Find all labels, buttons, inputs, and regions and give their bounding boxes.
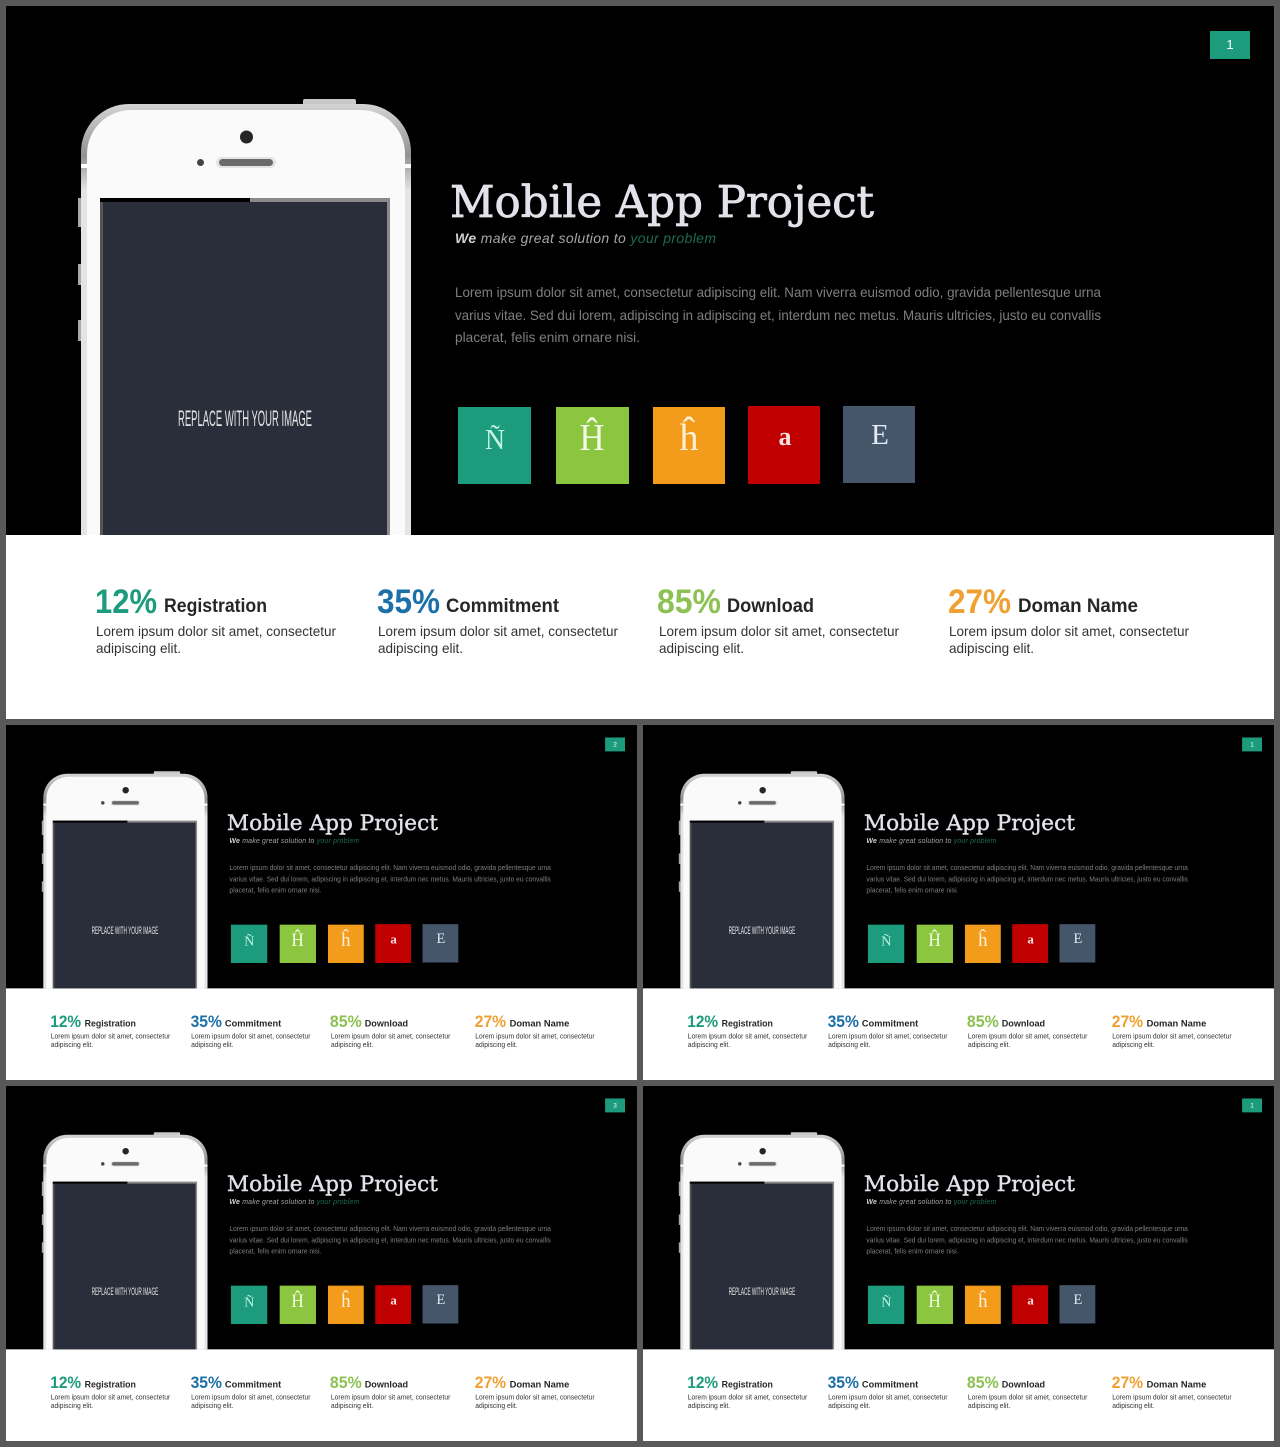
stat: domain name: adipiscing elit. [949, 640, 1034, 656]
page number badge [605, 1098, 625, 1112]
page number badge [1210, 31, 1250, 59]
body paragraph: varius vitae. Sed dui lorem, adipiscing in adipiscing et, interdum nec metus. Mauris ultricies, justo eu convallis [866, 1237, 1188, 1244]
icon tiles: E [871, 419, 889, 451]
icon tiles: ĥ [978, 929, 988, 951]
stat: download [330, 1012, 451, 1049]
page number badge: 1 [1250, 1102, 1254, 1109]
stat: commitment [377, 583, 618, 656]
body paragraph: placerat, felis enim ornare nisi. [455, 329, 640, 345]
stat: download: 85% [967, 1373, 999, 1392]
body paragraph: Lorem ipsum dolor sit amet, consectetur adipiscing elit. Nam viverra euismod odio, gravida pellentesque urna [455, 284, 1101, 300]
icon tiles: E [1073, 1292, 1082, 1308]
stat: domain name: 27% [1112, 1373, 1143, 1392]
icon tiles: Ĥ [291, 929, 304, 951]
stat: registration: adipiscing elit. [51, 1403, 93, 1410]
stat: registration [95, 583, 336, 656]
icon tiles: a [390, 932, 397, 947]
stat: commitment: 35% [377, 583, 440, 621]
slide 1: large [6, 6, 1274, 719]
icon tiles: a [1027, 932, 1034, 947]
stat: registration: 12% [50, 1012, 81, 1031]
stat: commitment: Commitment [225, 1380, 282, 1391]
phone mockup [42, 771, 208, 988]
stat: registration: Lorem ipsum dolor sit amet, consectetur [51, 1034, 171, 1041]
stat: download [967, 1012, 1088, 1049]
body paragraph: placerat, felis enim ornare nisi. [229, 887, 322, 894]
icon tiles: ĥ [341, 929, 351, 951]
stat: registration: Registration [722, 1019, 773, 1030]
phone mockup: REPLACE WITH YOUR IMAGE [729, 925, 795, 937]
stat: download: 85% [967, 1012, 999, 1031]
icon tiles [458, 406, 915, 484]
body paragraph: Lorem ipsum dolor sit amet, consectetur adipiscing elit. Nam viverra euismod odio, gravida pellentesque urna [866, 865, 1188, 872]
stat: domain name [475, 1373, 595, 1410]
stat: domain name: Lorem ipsum dolor sit amet, consectetur [949, 623, 1189, 639]
icon tiles: Ĥ [291, 1290, 304, 1312]
body paragraph: Lorem ipsum dolor sit amet, consectetur adipiscing elit. Nam viverra euismod odio, gravida pellentesque urna [866, 1226, 1188, 1233]
slide 4: thumbnail bottom left [6, 1086, 637, 1441]
stat: domain name: Lorem ipsum dolor sit amet, consectetur [1112, 1034, 1232, 1041]
stat: download [330, 1373, 451, 1410]
icon tiles: Ñ [244, 934, 254, 950]
stat: download: Lorem ipsum dolor sit amet, consectetur [659, 623, 899, 639]
icon tiles: E [1073, 931, 1082, 947]
stat: commitment: adipiscing elit. [191, 1403, 233, 1410]
stat: download: Lorem ipsum dolor sit amet, consectetur [968, 1034, 1088, 1041]
slide 2: thumbnail top left [6, 725, 637, 1080]
body paragraph [866, 1226, 1188, 1255]
body paragraph: Lorem ipsum dolor sit amet, consectetur adipiscing elit. Nam viverra euismod odio, gravida pellentesque urna [229, 1226, 551, 1233]
stat: registration: adipiscing elit. [688, 1042, 730, 1049]
stat: domain name: adipiscing elit. [1112, 1042, 1155, 1049]
subtitle: We make great solution to your problem [866, 1199, 996, 1206]
body paragraph: placerat, felis enim ornare nisi. [866, 887, 959, 894]
icon tiles: ĥ [978, 1290, 988, 1312]
stat: registration: Lorem ipsum dolor sit amet, consectetur [688, 1034, 808, 1041]
stat: commitment: Lorem ipsum dolor sit amet, consectetur [191, 1395, 311, 1402]
title: Mobile App Project [864, 811, 1075, 836]
stat: domain name [948, 583, 1189, 656]
icon tiles: Ĥ [580, 417, 604, 459]
stat: commitment: 35% [191, 1373, 222, 1392]
body paragraph: placerat, felis enim ornare nisi. [866, 1248, 959, 1255]
stat: domain name: Doman Name [1018, 596, 1138, 617]
stat: domain name: 27% [1112, 1012, 1143, 1031]
stat: registration: Registration [85, 1019, 136, 1030]
stat: download: 85% [330, 1012, 362, 1031]
stat: registration: Registration [164, 596, 267, 617]
stat: domain name: Lorem ipsum dolor sit amet, consectetur [475, 1034, 595, 1041]
page number badge: 3 [613, 1102, 617, 1109]
stat: domain name: Doman Name [510, 1019, 569, 1030]
stat: registration [687, 1012, 808, 1049]
stat: commitment: 35% [828, 1012, 859, 1031]
stat: registration: Lorem ipsum dolor sit amet, consectetur [51, 1395, 171, 1402]
stat: download: Download [365, 1380, 408, 1391]
icon tiles: a [778, 422, 792, 451]
page number badge: 2 [613, 741, 617, 748]
stat: commitment: Commitment [225, 1019, 282, 1030]
stat: commitment: adipiscing elit. [378, 640, 463, 656]
stat: download [967, 1373, 1088, 1410]
subtitle: We make great solution to your problem [229, 1199, 359, 1206]
icon tiles [231, 924, 458, 963]
dark upper panel [6, 6, 1274, 535]
stat: domain name [1112, 1012, 1232, 1049]
stat: commitment: adipiscing elit. [828, 1042, 870, 1049]
stat: commitment: Commitment [862, 1019, 919, 1030]
icon tiles: ĥ [341, 1290, 351, 1312]
stat: domain name [475, 1012, 595, 1049]
stat: download: 85% [657, 583, 721, 621]
stat: registration: adipiscing elit. [688, 1403, 730, 1410]
page number badge [1242, 737, 1262, 751]
body paragraph: varius vitae. Sed dui lorem, adipiscing in adipiscing et, interdum nec metus. Mauris ultricies, justo eu convallis [229, 876, 551, 883]
stat: commitment: Lorem ipsum dolor sit amet, consectetur [378, 623, 618, 639]
body paragraph: placerat, felis enim ornare nisi. [229, 1248, 322, 1255]
body paragraph [455, 284, 1101, 345]
stat: domain name [1112, 1373, 1232, 1410]
stat: download [657, 583, 899, 656]
stat: commitment: Lorem ipsum dolor sit amet, consectetur [191, 1034, 311, 1041]
icon tiles [868, 924, 1095, 963]
stat: domain name: Doman Name [1147, 1019, 1206, 1030]
stat: download: adipiscing elit. [659, 640, 744, 656]
body paragraph: varius vitae. Sed dui lorem, adipiscing in adipiscing et, interdum nec metus. Mauris ultricies, justo eu convallis [229, 1237, 551, 1244]
phone mockup [78, 99, 411, 535]
page number badge [605, 737, 625, 751]
phone mockup [679, 1132, 845, 1349]
white stats panel [6, 535, 1274, 719]
stat: registration: 12% [50, 1373, 81, 1392]
stat: commitment: Commitment [862, 1380, 919, 1391]
icon tiles [231, 1285, 458, 1324]
icon tiles: Ñ [881, 1295, 891, 1311]
stat: domain name: 27% [475, 1373, 506, 1392]
page number badge [1242, 1098, 1262, 1112]
stat: download: Lorem ipsum dolor sit amet, consectetur [968, 1395, 1088, 1402]
stat: download: Download [365, 1019, 408, 1030]
stat: download: Download [1002, 1380, 1045, 1391]
stat: commitment [828, 1012, 948, 1049]
stat: download: Download [1002, 1019, 1045, 1030]
stat: download: adipiscing elit. [968, 1042, 1010, 1049]
page number badge: 1 [1250, 741, 1254, 748]
body paragraph [229, 1226, 551, 1255]
body paragraph [229, 865, 551, 894]
stat: download: adipiscing elit. [331, 1042, 373, 1049]
icon tiles: E [436, 931, 445, 947]
stat: domain name: Doman Name [510, 1380, 569, 1391]
icon tiles: Ñ [881, 934, 891, 950]
stat: domain name: Lorem ipsum dolor sit amet, consectetur [475, 1395, 595, 1402]
body paragraph: varius vitae. Sed dui lorem, adipiscing in adipiscing et, interdum nec metus. Mauris ultricies, justo eu convallis [455, 307, 1101, 323]
icon tiles: Ñ [244, 1295, 254, 1311]
body paragraph: Lorem ipsum dolor sit amet, consectetur adipiscing elit. Nam viverra euismod odio, gravida pellentesque urna [229, 865, 551, 872]
icon tiles: Ñ [485, 425, 505, 456]
body paragraph [866, 865, 1188, 894]
stat: registration: 12% [95, 583, 157, 621]
phone mockup: REPLACE WITH YOUR IMAGE [92, 1286, 158, 1298]
stat: registration [50, 1373, 171, 1410]
stat: domain name: adipiscing elit. [475, 1403, 518, 1410]
stat: download: Download [727, 596, 814, 617]
slide 5: thumbnail bottom right [643, 1086, 1274, 1441]
icon tiles: a [390, 1293, 397, 1308]
icon tiles: E [436, 1292, 445, 1308]
stat: download: Lorem ipsum dolor sit amet, consectetur [331, 1034, 451, 1041]
stat: registration [687, 1373, 808, 1410]
stat: registration: Registration [722, 1380, 773, 1391]
stat: download: Lorem ipsum dolor sit amet, consectetur [331, 1395, 451, 1402]
icon tiles: Ĥ [928, 929, 941, 951]
stat: domain name: Lorem ipsum dolor sit amet, consectetur [1112, 1395, 1232, 1402]
stat: commitment: 35% [828, 1373, 859, 1392]
stat: download: adipiscing elit. [331, 1403, 373, 1410]
icon tiles: a [1027, 1293, 1034, 1308]
stat: domain name: adipiscing elit. [1112, 1403, 1155, 1410]
stat: domain name: adipiscing elit. [475, 1042, 518, 1049]
stat: commitment [828, 1373, 948, 1410]
stat: download: adipiscing elit. [968, 1403, 1010, 1410]
stat: registration: adipiscing elit. [96, 640, 181, 656]
stat: domain name: Doman Name [1147, 1380, 1206, 1391]
stat: commitment [191, 1012, 311, 1049]
stat: commitment: Lorem ipsum dolor sit amet, consectetur [828, 1034, 948, 1041]
subtitle: We make great solution to your problem [455, 230, 716, 246]
title: Mobile App Project [450, 177, 874, 228]
title: Mobile App Project [227, 811, 438, 836]
stat: download: 85% [330, 1373, 362, 1392]
icon tiles [868, 1285, 1095, 1324]
stat: registration: adipiscing elit. [51, 1042, 93, 1049]
phone mockup [679, 771, 845, 988]
phone mockup [42, 1132, 208, 1349]
stat: commitment: 35% [191, 1012, 222, 1031]
stat: domain name: 27% [475, 1012, 506, 1031]
phone mockup: REPLACE WITH YOUR IMAGE [92, 925, 158, 937]
stat: registration [50, 1012, 171, 1049]
stat: commitment [191, 1373, 311, 1410]
icon tiles: Ĥ [928, 1290, 941, 1312]
subtitle: We make great solution to your problem [229, 838, 359, 845]
title: Mobile App Project [864, 1172, 1075, 1197]
title: Mobile App Project [227, 1172, 438, 1197]
phone mockup: REPLACE WITH YOUR IMAGE [729, 1286, 795, 1298]
page number badge: 1 [1226, 37, 1234, 52]
phone mockup: REPLACE WITH YOUR IMAGE [178, 406, 312, 431]
body paragraph: varius vitae. Sed dui lorem, adipiscing in adipiscing et, interdum nec metus. Mauris ultricies, justo eu convallis [866, 876, 1188, 883]
subtitle: We make great solution to your problem [866, 838, 996, 845]
stat: commitment: Lorem ipsum dolor sit amet, consectetur [828, 1395, 948, 1402]
stat: registration: 12% [687, 1373, 718, 1392]
stat: commitment: adipiscing elit. [828, 1403, 870, 1410]
stat: registration: Registration [85, 1380, 136, 1391]
stat: commitment: Commitment [446, 596, 560, 617]
stat: registration: 12% [687, 1012, 718, 1031]
stat: registration: Lorem ipsum dolor sit amet, consectetur [688, 1395, 808, 1402]
stat: registration: Lorem ipsum dolor sit amet, consectetur [96, 623, 336, 639]
stat: domain name: 27% [948, 583, 1011, 621]
icon tiles: ĥ [680, 416, 698, 459]
stat: commitment: adipiscing elit. [191, 1042, 233, 1049]
slide 3: thumbnail top right [643, 725, 1274, 1080]
